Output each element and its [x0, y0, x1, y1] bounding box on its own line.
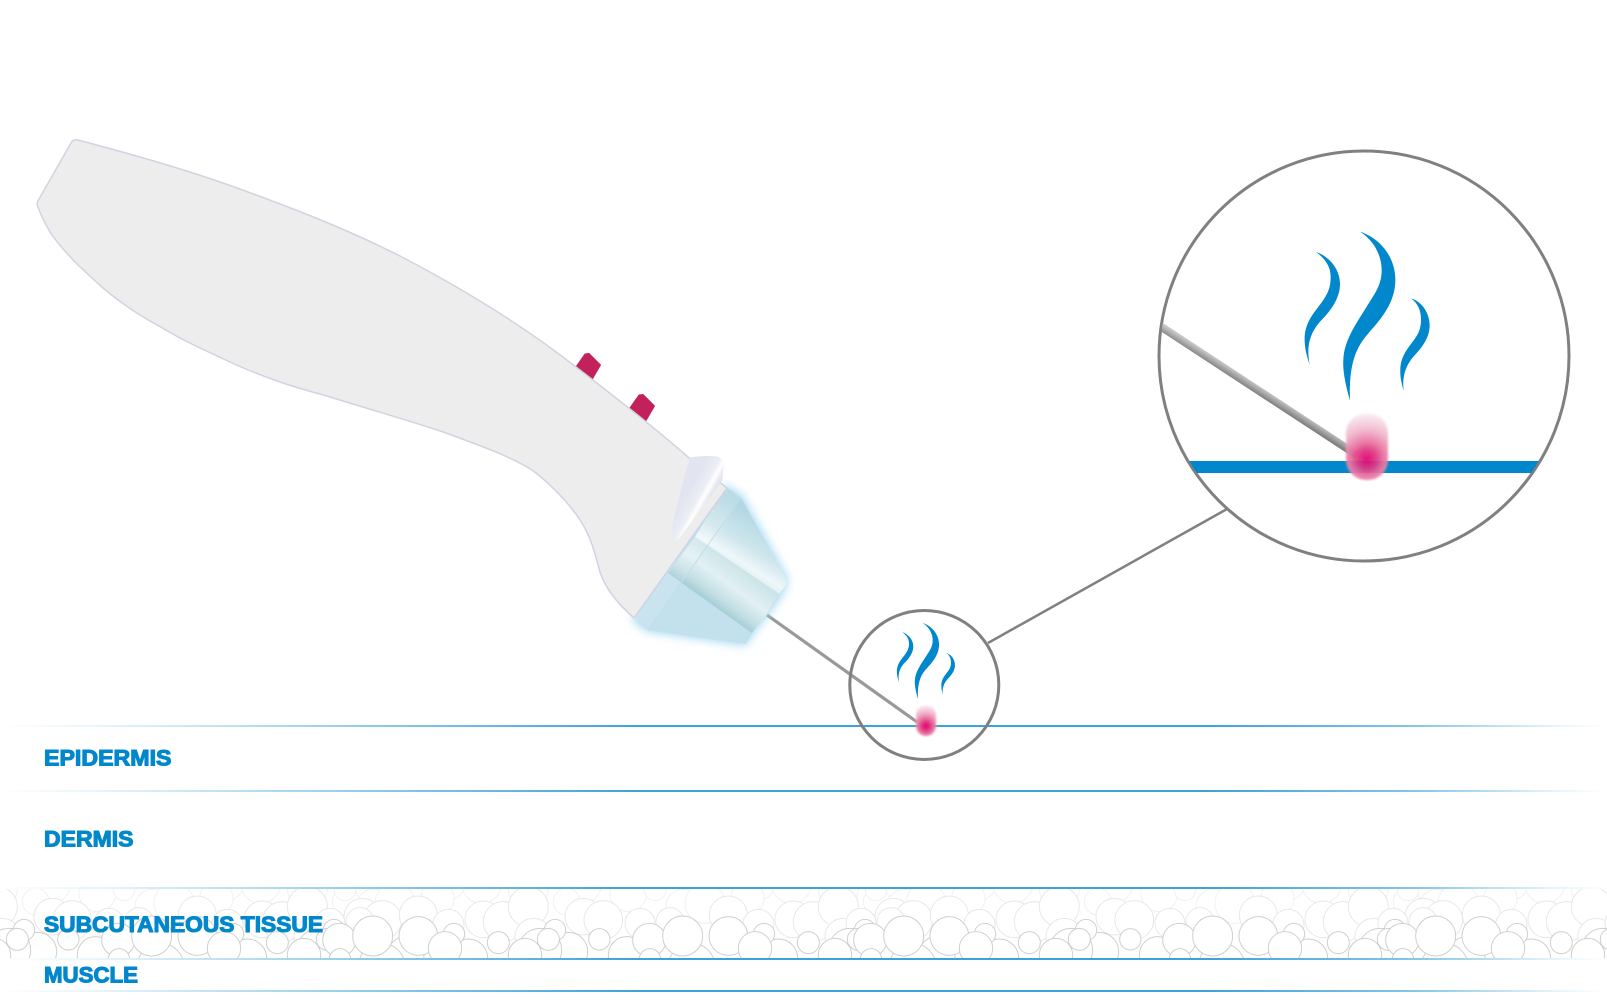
handle body	[37, 140, 727, 618]
large magnifier	[1150, 151, 1580, 561]
nozzle glow	[632, 485, 788, 645]
small treatment spot	[916, 705, 936, 736]
skin layer boundary lines	[0, 725, 1607, 992]
needle	[1160, 326, 1357, 455]
handle collar	[672, 456, 724, 541]
subcutaneous fat cell pattern	[0, 863, 1607, 990]
icon: small steam	[897, 623, 955, 699]
device tip needle	[767, 615, 917, 722]
device nozzle	[632, 485, 788, 645]
nozzle seam line	[648, 498, 741, 630]
magnifier circle	[1159, 151, 1569, 561]
nozzle lower face	[635, 573, 752, 644]
label: subcutaneous tissue: SUBCUTANEOUS TISSUE	[44, 912, 323, 937]
buttons	[574, 354, 654, 424]
label: dermis: DERMIS	[44, 826, 134, 852]
small magnifier circle	[850, 610, 999, 760]
treatment spot	[1346, 413, 1388, 480]
nozzle side strip	[635, 487, 741, 630]
connector line	[988, 509, 1227, 643]
nozzle upper cone	[695, 487, 787, 594]
layer labels	[44, 746, 323, 988]
skin surface line	[1189, 461, 1539, 473]
icon: large steam	[1305, 232, 1430, 401]
label: epidermis: EPIDERMIS	[44, 746, 172, 770]
nozzle band	[668, 537, 779, 633]
label: muscle: MUSCLE	[44, 962, 138, 988]
